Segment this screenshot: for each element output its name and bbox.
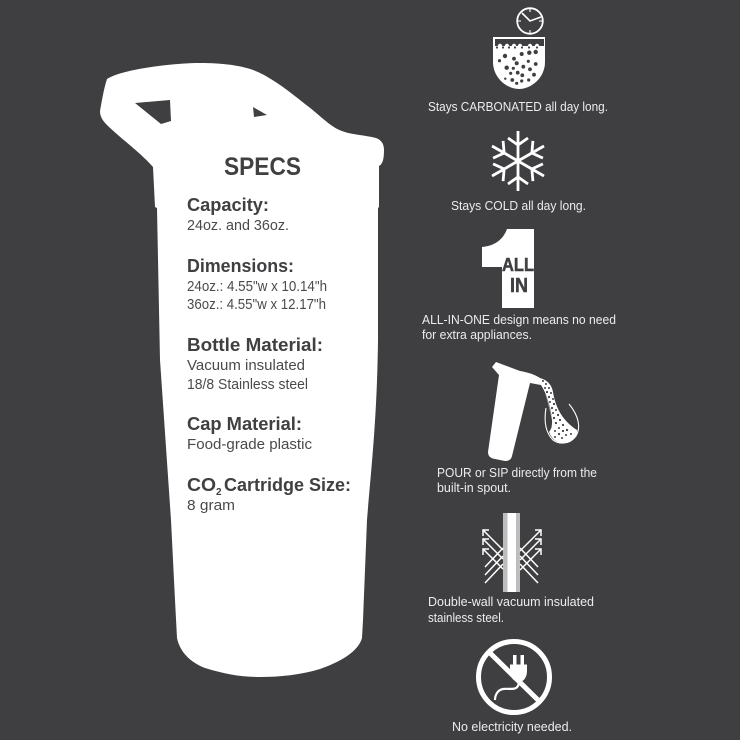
spec: bottle material: Bottle Material:	[187, 335, 323, 355]
icon: clock	[517, 8, 543, 34]
feature: double wall	[428, 513, 594, 625]
icon: snowflake	[487, 131, 549, 191]
caption: double wall: stainless steel.	[428, 611, 504, 625]
spec: dimensions: Dimensions:	[187, 256, 294, 276]
caption: cold: Stays COLD all day long.	[451, 199, 586, 213]
feature: all in one	[422, 229, 616, 342]
icon: insulated wall with deflected arrows	[483, 513, 541, 592]
icon: carbonated bubbles container	[493, 37, 545, 89]
feature: no electricity	[452, 642, 572, 734]
icon: bottle pouring into glass	[488, 362, 579, 461]
spec: cartridge size: Cartridge Size:	[224, 475, 351, 495]
icon: number one all in	[482, 229, 534, 308]
spec: bottle material	[187, 335, 323, 393]
feature: carbonated	[428, 8, 608, 114]
caption: all in one: for extra appliances.	[422, 328, 532, 342]
spec: dimensions: 24oz.: 4.55"w x 10.14"h	[187, 278, 327, 295]
spec: cap material: Cap Material:	[187, 414, 302, 434]
icon: number one all in: IN	[510, 275, 528, 297]
caption: all in one	[422, 313, 616, 342]
icon: number one all in: ALL	[502, 255, 534, 275]
spec: bottle material: Vacuum insulated	[187, 357, 305, 374]
spec: cap material: Food-grade plastic	[187, 436, 313, 453]
caption: pour or sip: built-in spout.	[437, 481, 511, 495]
feature: pour or sip	[437, 362, 597, 495]
spec: cartridge size: 8 gram	[187, 497, 235, 514]
heading: specs: SPECS	[224, 153, 301, 181]
spec: cartridge size	[187, 475, 351, 514]
caption: pour or sip: POUR or SIP directly from the	[437, 466, 597, 480]
spec: capacity: Capacity:	[187, 195, 269, 215]
panel: bottle specs	[100, 63, 384, 677]
spec: dimensions	[187, 256, 327, 313]
bottle silhouette	[100, 63, 384, 677]
caption: no electricity: No electricity needed.	[452, 720, 572, 734]
caption: all in one: ALL-IN-ONE design means no need	[422, 313, 616, 327]
caption: double wall: Double-wall vacuum insulated	[428, 595, 594, 609]
spec: bottle material: 18/8 Stainless steel	[187, 376, 308, 393]
spec: capacity: 24oz. and 36oz.	[187, 217, 289, 234]
caption: pour or sip	[437, 466, 597, 495]
spec: cartridge size: CO	[187, 475, 216, 495]
caption: carbonated: Stays CARBONATED all day long.	[428, 100, 608, 114]
icon: crossed out plug	[478, 642, 550, 712]
caption: double wall	[428, 595, 594, 625]
spec: cartridge size: 2	[216, 487, 222, 498]
spec: dimensions: 36oz.: 4.55"w x 12.17"h	[187, 296, 326, 313]
spec: capacity	[187, 195, 289, 234]
spec: cap material	[187, 414, 313, 453]
feature: cold	[451, 131, 586, 213]
